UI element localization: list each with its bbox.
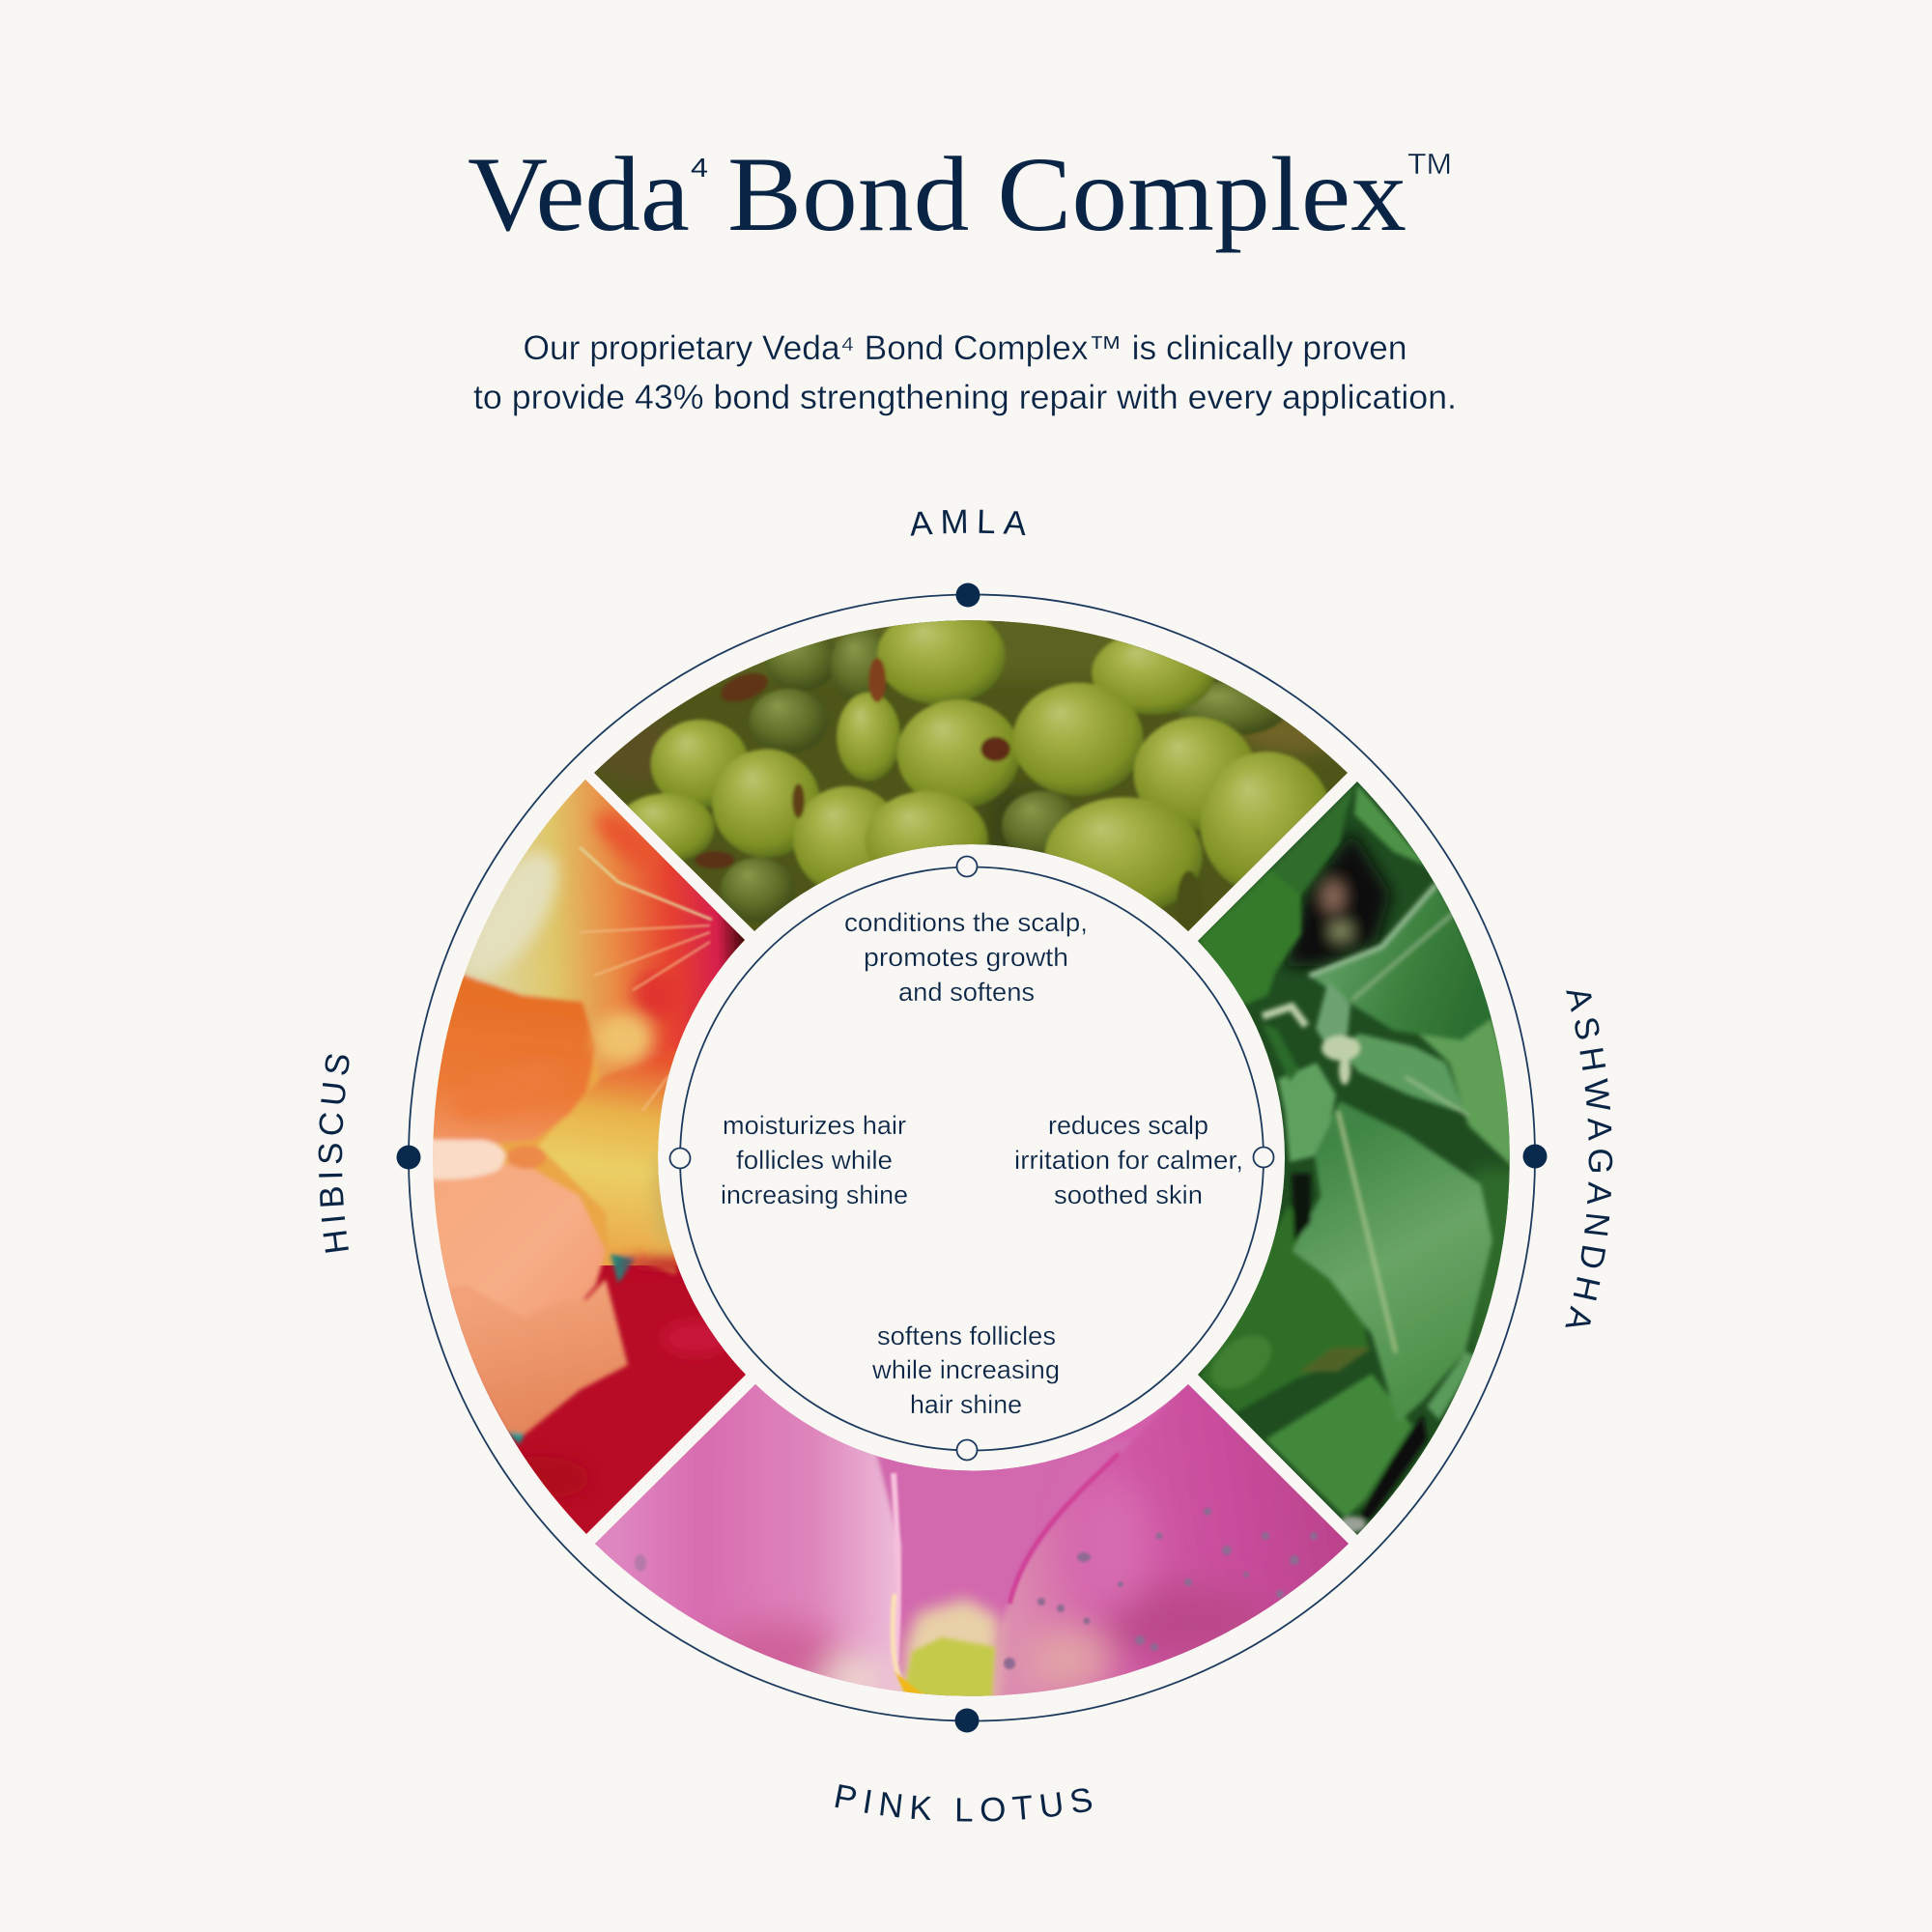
- ashwagandha benefit text: soothed skin: [1054, 1180, 1203, 1209]
- ashwagandha marker dot: [1522, 1144, 1548, 1169]
- label: hibiscus: HIBISCUS: [319, 1054, 350, 1253]
- amla benefit text: [844, 908, 1088, 1007]
- pink lotus benefit text: hair shine: [910, 1390, 1022, 1419]
- hibiscus benefit text: increasing shine: [721, 1180, 908, 1209]
- panel: ashwagandha photo segment: [1198, 781, 1510, 1535]
- title: Bond Complex: [727, 135, 1406, 253]
- hibiscus benefit text: moisturizes hair: [723, 1111, 906, 1140]
- pink lotus inner marker: [956, 1439, 978, 1461]
- hibiscus benefit text: [721, 1111, 908, 1209]
- inner ring line: [680, 867, 1264, 1451]
- label: ashwagandha: ASHWAGANDHA: [1565, 991, 1613, 1327]
- ingredient wheel: [319, 510, 1613, 1822]
- amla benefit text: promotes growth: [864, 943, 1068, 972]
- title: [468, 135, 1452, 253]
- intro text: to provide 43% bond strengthening repair with every application.: [473, 379, 1457, 416]
- ashwagandha benefit text: irritation for calmer,: [1014, 1146, 1243, 1175]
- pink lotus benefit text: softens follicles: [877, 1321, 1056, 1350]
- ashwagandha benefit text: reduces scalp: [1048, 1111, 1208, 1140]
- amla marker dot: [956, 583, 980, 607]
- title: Veda: [468, 135, 690, 253]
- pink lotus benefit text: [871, 1321, 1060, 1419]
- amla benefit text: conditions the scalp,: [844, 908, 1088, 937]
- ashwagandha inner marker: [1254, 1148, 1273, 1167]
- amla inner marker: [956, 856, 978, 877]
- intro text: Our proprietary Veda⁴ Bond Complex™ is clinically proven: [524, 329, 1406, 367]
- hibiscus benefit text: follicles while: [736, 1146, 893, 1175]
- hibiscus marker dot: [396, 1146, 421, 1169]
- label: pink lotus: PINK LOTUS: [835, 1784, 1092, 1822]
- amla benefit text: and softens: [898, 978, 1035, 1007]
- title: TM: [1407, 147, 1452, 181]
- pink lotus benefit text: while increasing: [871, 1355, 1060, 1384]
- panel: amla photo segment: [594, 620, 1348, 931]
- label: amla: AMLA: [910, 510, 1026, 536]
- title: 4: [691, 153, 708, 183]
- pink lotus marker dot: [954, 1708, 980, 1733]
- outer ring line: [409, 595, 1535, 1721]
- intro text: [473, 329, 1457, 416]
- panel: hibiscus photo segment: [433, 780, 746, 1534]
- panel: pink lotus photo segment: [595, 1384, 1349, 1696]
- ashwagandha benefit text: [1014, 1111, 1243, 1209]
- hibiscus inner marker: [670, 1148, 690, 1169]
